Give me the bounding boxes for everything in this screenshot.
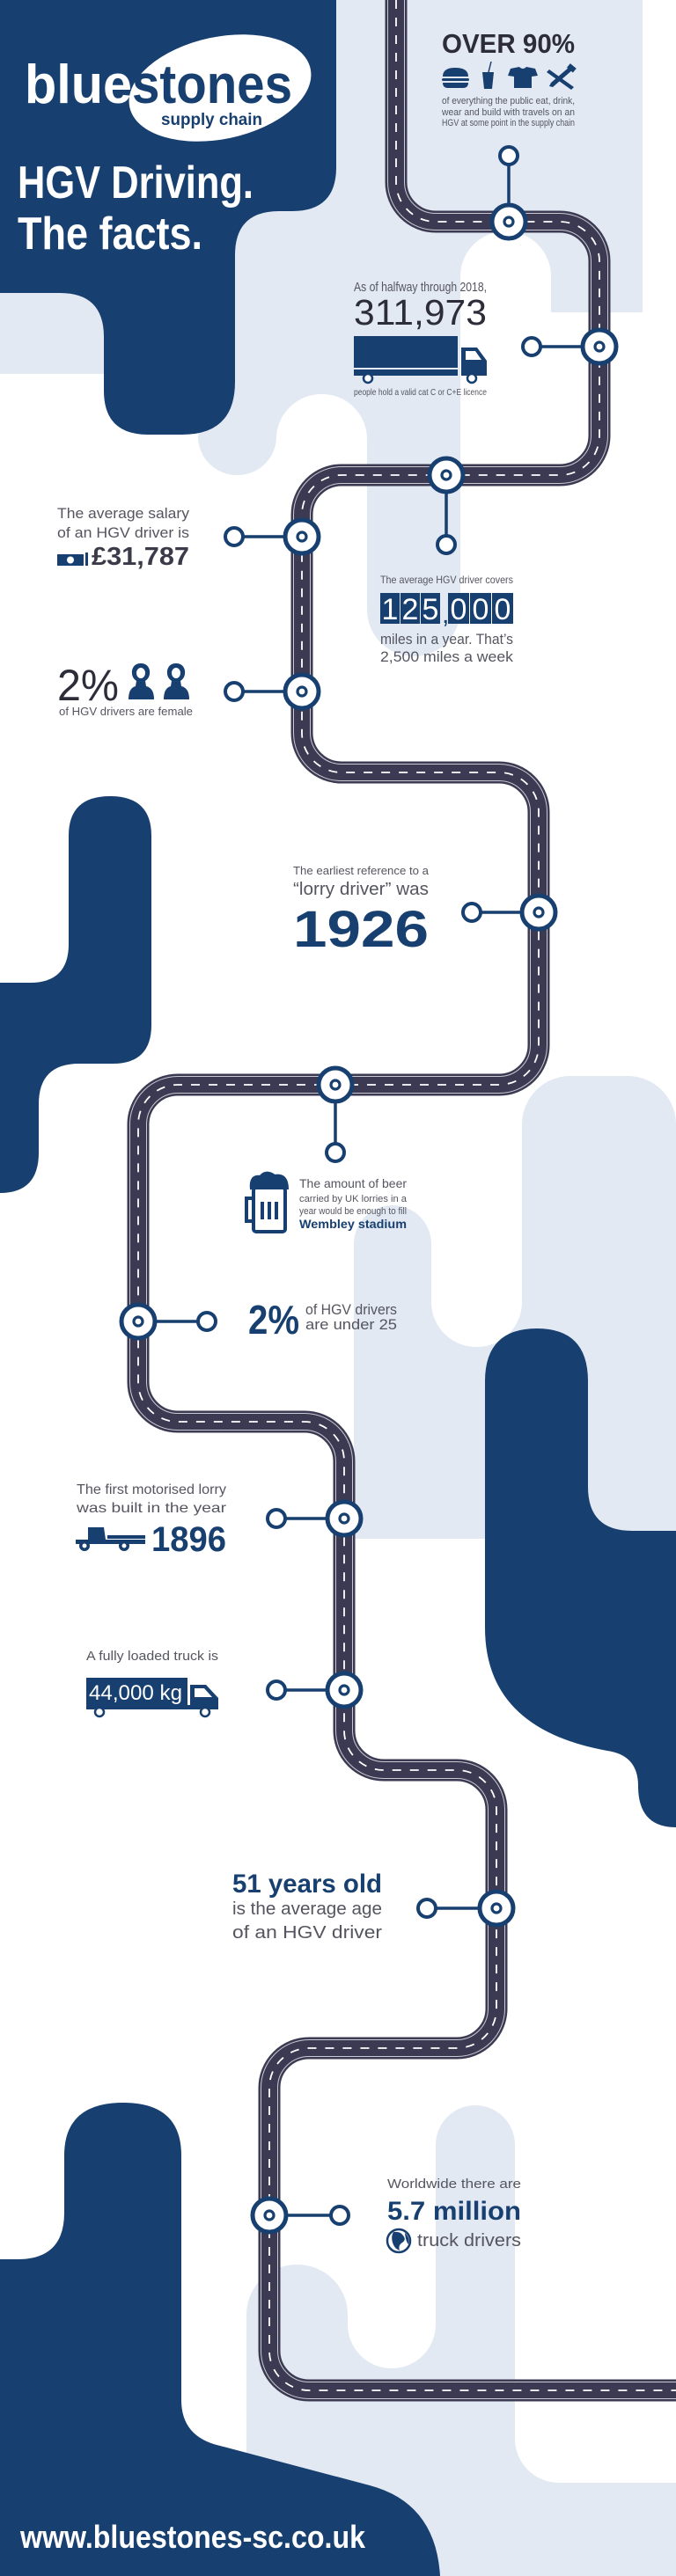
fact: over 90%: HGV at some point in the supply chain <box>442 118 575 128</box>
title <box>18 157 254 260</box>
fact: under 25: of HGV drivers <box>305 1301 397 1318</box>
fact: licence holders <box>354 280 487 398</box>
logo <box>25 18 321 157</box>
fact: under 25: are under 25 <box>305 1316 397 1333</box>
fact: 1896: was built in the year <box>76 1501 227 1516</box>
fact: average age: 51 years old <box>232 1870 382 1899</box>
fact: miles: 5 <box>422 593 438 626</box>
nodes <box>121 147 616 2232</box>
fact: female drivers <box>57 661 193 718</box>
fact: miles: 0 <box>451 593 467 626</box>
fact: miles: 2 <box>402 593 418 626</box>
fact: miles: miles in a year. That’s <box>380 631 513 648</box>
icons: burger, drink, shirt, tools <box>442 62 577 90</box>
fact: miles: 0 <box>495 593 511 626</box>
fact: average age <box>232 1870 382 1943</box>
fact: salary: The average salary <box>57 505 190 522</box>
icon: truck <box>354 336 487 383</box>
fact: beer <box>246 1174 408 1232</box>
road <box>138 0 676 2390</box>
fact: licence holders: As of halfway through 2018, <box>354 280 487 295</box>
fact: 1926: The earliest reference to a <box>293 864 430 877</box>
fact: beer: carried by UK lorries in a <box>299 1194 408 1204</box>
fact: female drivers: of HGV drivers are female <box>59 705 193 718</box>
fact: 1896: 1896 <box>151 1520 226 1559</box>
fact: worldwide <box>387 2177 521 2252</box>
fact: 1896 <box>76 1482 227 1559</box>
fact: worldwide: truck drivers <box>417 2231 521 2250</box>
fact: miles: 0 <box>473 593 489 626</box>
logo: stones <box>132 55 292 115</box>
fact: under 25 <box>248 1297 397 1343</box>
fact: beer: Wembley stadium <box>299 1217 407 1231</box>
fact: miles: 2,500 miles a week <box>380 648 514 665</box>
fact: licence holders: people hold a valid cat C or C+E licence <box>354 388 487 398</box>
logo: blue <box>25 55 132 115</box>
fact: salary: of an HGV driver is <box>57 524 189 541</box>
fact: salary: £31,787 <box>92 543 189 571</box>
fact: salary <box>57 505 190 571</box>
fact: under 25: 2% <box>248 1297 299 1343</box>
logo: supply chain <box>161 111 262 129</box>
footer url: www.bluestones-sc.co.uk <box>19 2519 366 2555</box>
fact: over 90%: of everything the public eat, drink, <box>442 96 575 106</box>
fact: beer: year would be enough to fill <box>299 1206 407 1217</box>
fact: worldwide: 5.7 million <box>387 2197 521 2226</box>
fact: miles <box>380 574 514 665</box>
fact: miles: , <box>442 600 449 629</box>
fact: worldwide: Worldwide there are <box>387 2177 521 2192</box>
fact: miles: 1 <box>382 593 398 626</box>
fact: beer: The amount of beer <box>299 1176 407 1190</box>
title: The facts. <box>18 209 202 260</box>
icon: women <box>129 663 189 699</box>
fact: 1926 <box>293 864 430 958</box>
title: HGV Driving. <box>18 157 254 209</box>
icon: old lorry <box>76 1527 145 1551</box>
fact: licence holders: 311,973 <box>354 292 487 333</box>
fact: 44,000 kg <box>86 1649 218 1716</box>
fact: female drivers: 2% <box>57 661 119 710</box>
icon: beer mug <box>246 1174 287 1232</box>
fact: average age: is the average age <box>232 1899 382 1919</box>
fact: 1926: “lorry driver” was <box>293 880 429 899</box>
fact: miles: The average HGV driver covers <box>380 574 513 586</box>
fact: 44,000 kg: A fully loaded truck is <box>86 1649 218 1664</box>
fact: 1926: 1926 <box>293 901 429 958</box>
fact: over 90% <box>441 28 577 128</box>
fact: 1896: The first motorised lorry <box>77 1482 226 1497</box>
icon: globe <box>387 2229 410 2252</box>
fact: average age: of an HGV driver <box>232 1923 382 1943</box>
fact: 44,000 kg: 44,000 kg <box>89 1681 182 1705</box>
icon: money <box>57 553 88 566</box>
fact: over 90%: OVER 90% <box>442 28 575 59</box>
fact: over 90%: wear and build with travels on an <box>441 107 575 118</box>
